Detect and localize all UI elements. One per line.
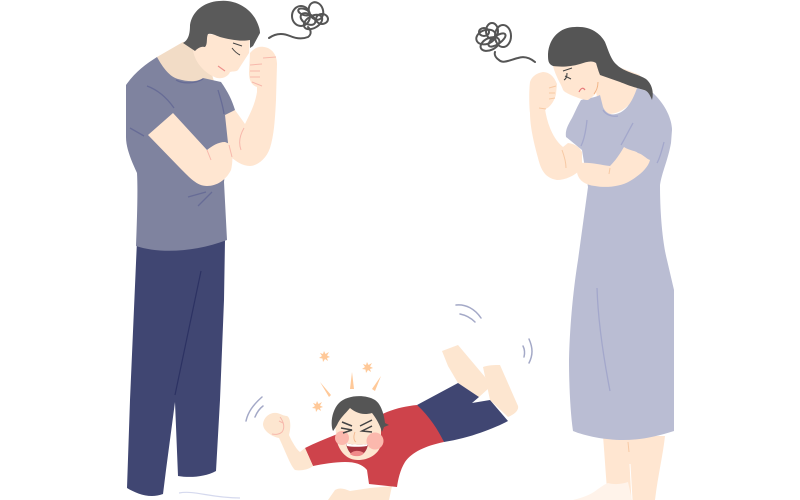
figure: tantrum child xyxy=(246,305,532,500)
mother dress xyxy=(566,88,674,440)
child mouth xyxy=(346,443,368,456)
mother scribble thought xyxy=(474,23,535,62)
father hair xyxy=(183,1,260,51)
child raised arm and fist xyxy=(263,413,313,470)
father raised arm and fist xyxy=(225,47,277,166)
child raised leg xyxy=(442,345,489,397)
father t-shirt xyxy=(126,57,235,251)
child face xyxy=(335,406,384,460)
mother face xyxy=(553,58,599,100)
mother legs and foot xyxy=(573,436,665,500)
mother neck xyxy=(590,60,640,114)
figure: father xyxy=(126,0,328,498)
mother raised arm and fist xyxy=(529,72,582,180)
father scribble thought xyxy=(269,0,328,38)
child cheeks xyxy=(335,431,349,445)
mother hair xyxy=(548,27,653,100)
child motion lines xyxy=(246,305,532,421)
child shirt xyxy=(305,405,444,487)
child eyes xyxy=(341,420,372,433)
child lower arm xyxy=(328,486,392,500)
father neck xyxy=(157,42,215,90)
father forearm xyxy=(148,113,232,186)
father floor shadow line xyxy=(179,492,240,498)
child anger spark marks xyxy=(312,351,381,412)
father trousers xyxy=(127,240,225,496)
child second leg xyxy=(483,365,518,417)
child hair xyxy=(332,396,389,432)
mother forearm xyxy=(577,147,650,187)
child shorts xyxy=(417,383,508,442)
figure: mother xyxy=(474,23,674,500)
father face xyxy=(193,34,250,78)
